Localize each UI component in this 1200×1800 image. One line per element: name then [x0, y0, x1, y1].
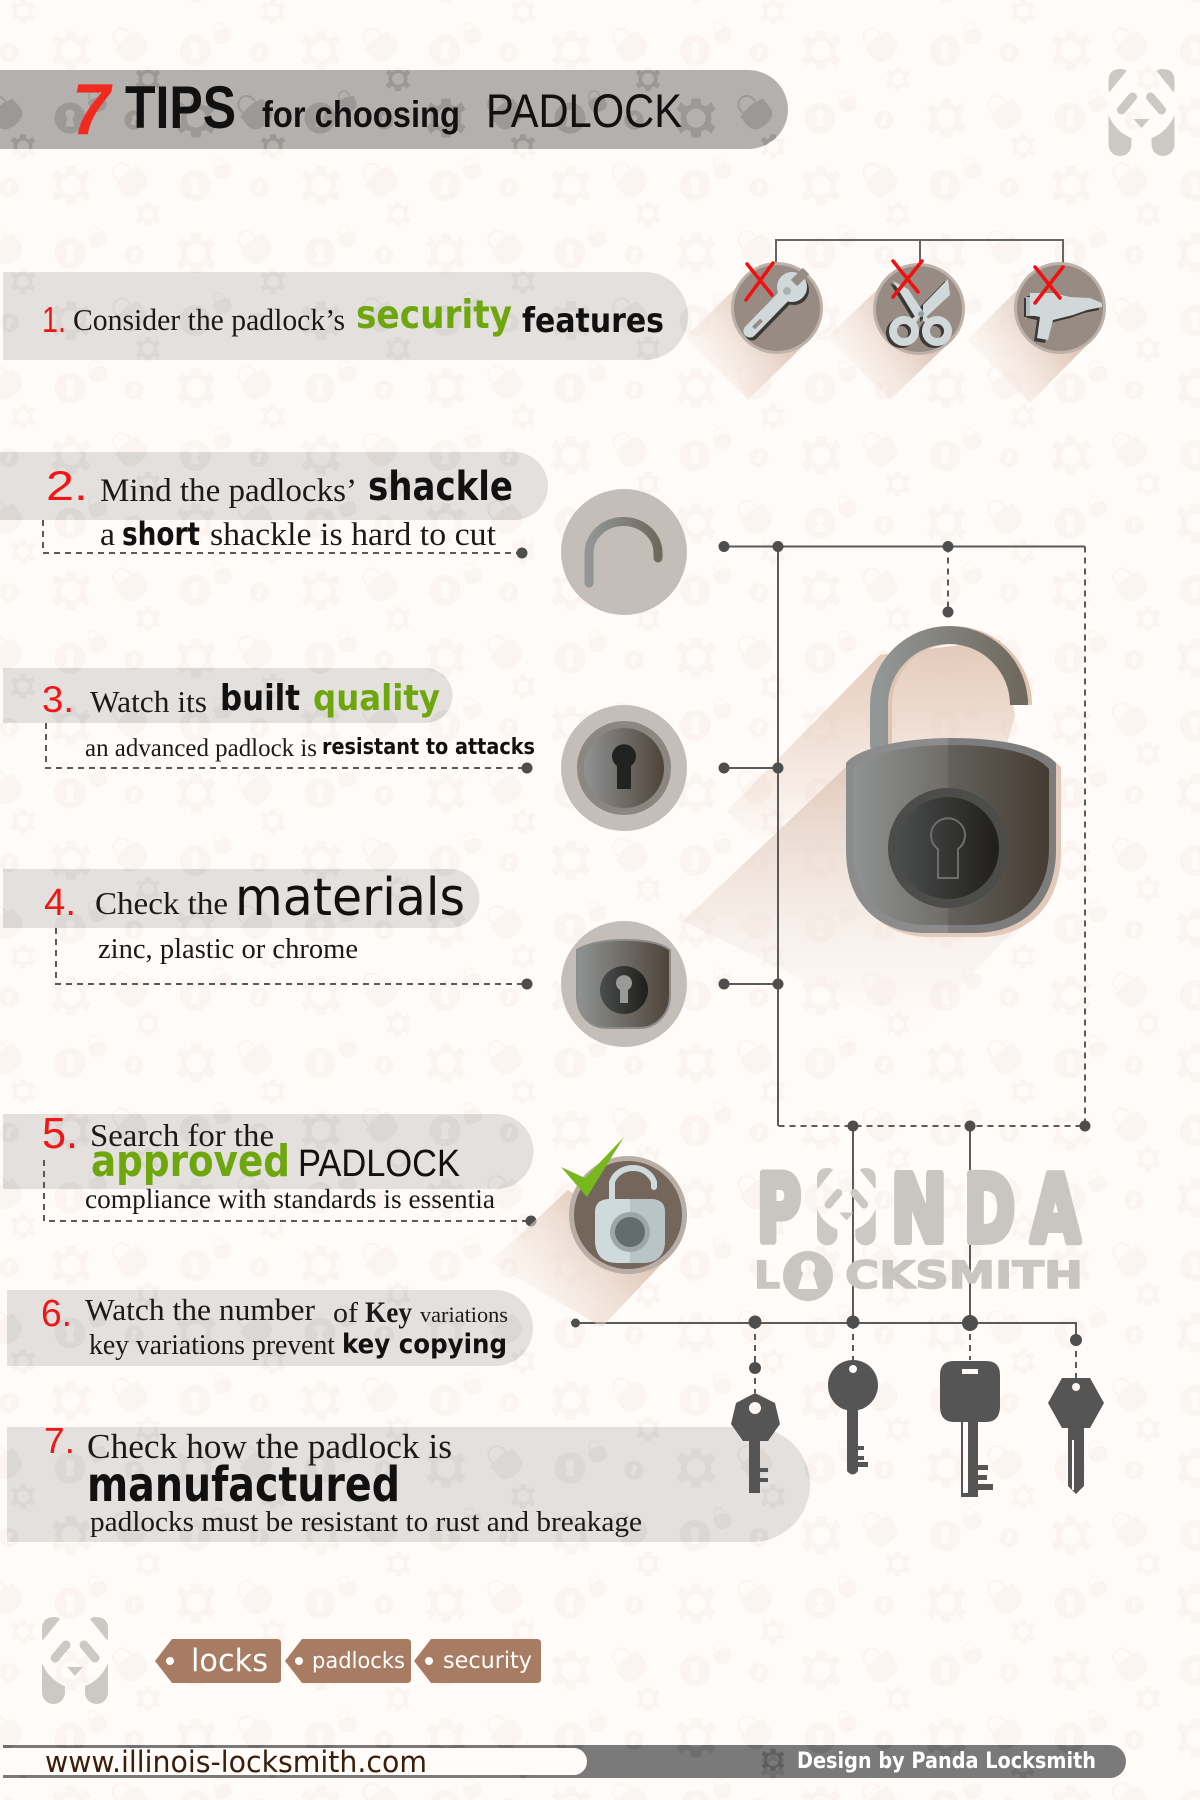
- tip 7 banner: manufactured: [87, 1457, 400, 1513]
- icon: scissors with red cross: [827, 261, 965, 400]
- keys: [731, 1360, 1104, 1497]
- tip 2 banner: Mind the padlocks’: [100, 473, 357, 509]
- tip 5 banner: 5.: [42, 1109, 78, 1158]
- tip 6 banner: Key: [365, 1296, 412, 1329]
- icon: wrench with red cross: [685, 262, 823, 400]
- panda logo bottom left: [42, 1617, 108, 1704]
- tip 4 banner: 4.: [44, 882, 76, 924]
- icon: approved padlock with check: [490, 1137, 687, 1327]
- tip 3 banner: 3.: [42, 679, 74, 720]
- tip 5 banner: compliance with standards is essentia: [85, 1184, 495, 1214]
- icon: panda logo top right: [1108, 69, 1174, 156]
- tip 1 banner: 1.: [42, 299, 66, 340]
- tip 1 banner: Consider the padlock’s: [73, 302, 345, 337]
- watermark logo: Panda Locksmith: [754, 1156, 1083, 1301]
- tip 6 banner: 6.: [41, 1293, 72, 1335]
- tip 3 banner: an advanced padlock is: [85, 735, 317, 762]
- tip 6 banner: of: [333, 1298, 359, 1329]
- tip 1 banner: features: [522, 301, 664, 341]
- tip 2 banner: shackle: [368, 464, 513, 510]
- tip 5 banner: Search for the: [90, 1117, 274, 1153]
- title banner: [0, 70, 788, 150]
- tip 6 banner: key copying: [342, 1329, 507, 1360]
- big padlock long shadow: [683, 640, 1050, 1035]
- tip 3 banner: resistant to attacks: [322, 735, 535, 760]
- watermark logo: Panda Locksmith: N: [891, 1156, 947, 1263]
- tip 3 banner: quality: [313, 678, 440, 719]
- tip 5 banner: [3, 1109, 536, 1226]
- footer bar: [3, 1745, 1126, 1779]
- tip 2 banner: short: [122, 515, 200, 553]
- big open padlock: [846, 635, 1061, 937]
- footer bar: www.illinois-locksmith.com: [45, 1745, 427, 1779]
- tip 2 banner: 2.: [46, 462, 88, 509]
- tip 6 banner: key variations prevent: [89, 1330, 335, 1361]
- tip 1 banner: security: [356, 293, 512, 338]
- tip 2 banner: a: [100, 517, 115, 553]
- tags: padlocks: [312, 1649, 405, 1674]
- title banner: 7: [72, 70, 113, 150]
- tip 4 banner: materials: [235, 868, 465, 928]
- tip 6 banner: variations: [420, 1302, 508, 1327]
- title banner: for choosing: [262, 94, 460, 135]
- tags: security: [443, 1648, 532, 1674]
- watermark logo: Panda Locksmith: L: [754, 1254, 780, 1297]
- footer bar: Design by Panda Locksmith: [797, 1749, 1096, 1774]
- tags: locks: [191, 1643, 268, 1679]
- tip 6 banner: [7, 1290, 533, 1366]
- icon: keyhole circle: [561, 705, 687, 831]
- connector lines: [571, 541, 1090, 1393]
- tip 5 banner: approved: [91, 1136, 290, 1187]
- tip 4 banner: [3, 868, 532, 990]
- tip 7 banner: [7, 1420, 810, 1542]
- tip 5 banner: PADLOCK: [298, 1143, 460, 1185]
- icon: drill with red cross: [967, 262, 1106, 403]
- tip 7 banner: Check how the padlock is: [87, 1427, 452, 1466]
- tip 3 banner: [3, 668, 535, 774]
- watermark logo: Panda Locksmith: D: [964, 1156, 1015, 1263]
- icon: shackle circle: [561, 489, 687, 615]
- tip 4 banner: zinc, plastic or chrome: [98, 934, 358, 965]
- tip 2 banner: [0, 452, 548, 558]
- tip 2 banner: shackle is hard to cut: [210, 517, 496, 553]
- watermark logo: Panda Locksmith: A: [1031, 1156, 1080, 1263]
- tip 1 banner: [3, 272, 688, 360]
- tip 6 banner: Watch the number: [85, 1292, 316, 1327]
- watermark logo: Panda Locksmith: CKSMITH: [845, 1254, 1083, 1297]
- tip 7 banner: 7.: [44, 1420, 75, 1461]
- tip 3 banner: built: [220, 678, 300, 719]
- tags: [155, 1639, 541, 1683]
- watermark logo: Panda Locksmith: P: [757, 1156, 801, 1263]
- tip 7 banner: padlocks must be resistant to rust and breakage: [90, 1506, 642, 1538]
- title banner: TIPS: [125, 74, 236, 141]
- title banner: PADLOCK: [486, 84, 682, 137]
- connector: tool icons bracket: [776, 240, 1063, 263]
- tip 3 banner: Watch its: [90, 684, 207, 719]
- tip 4 banner: Check the: [95, 885, 228, 921]
- icon: padlock body circle: [561, 921, 687, 1047]
